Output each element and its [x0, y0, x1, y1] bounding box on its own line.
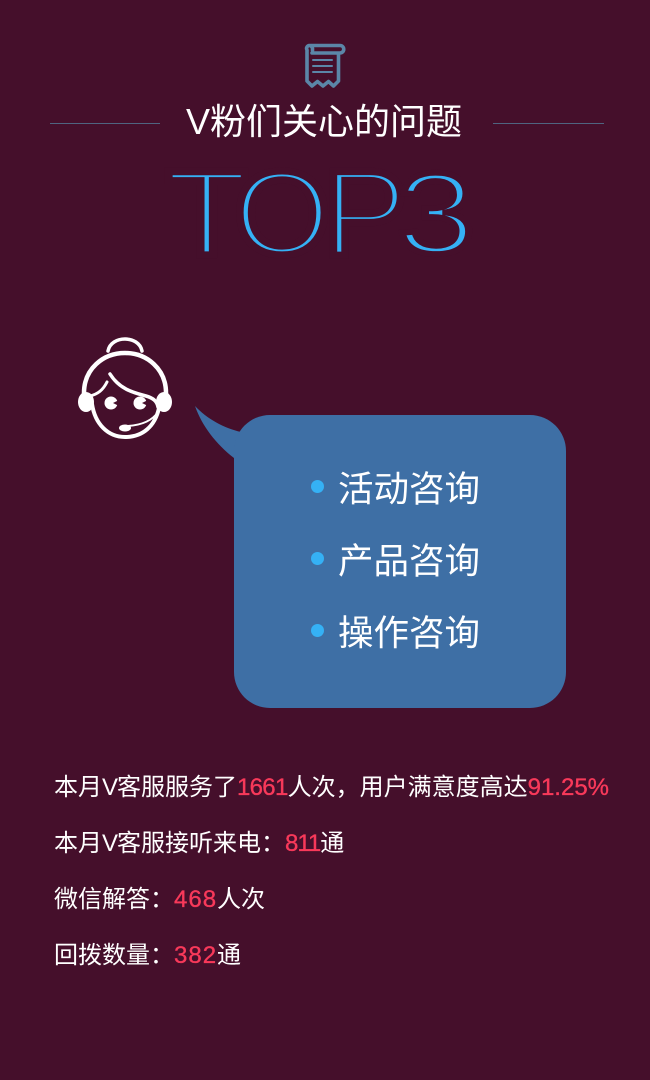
stat line 4: 回拨数量：382通 [54, 942, 241, 969]
icon: paper scroll [304, 44, 346, 88]
right divider [493, 123, 604, 124]
stat line 1: 本月V客服服务了1661人次，用户满意度高达91.25% [54, 774, 609, 801]
speech bubble [195, 406, 566, 708]
heading: V粉们关心的问题 [186, 101, 462, 142]
bubble tail and body [195, 406, 566, 708]
stats text [54, 774, 609, 969]
list: top three questions [311, 469, 480, 653]
icon: customer service agent [78, 337, 172, 439]
item 2: 产品咨询 [338, 541, 480, 581]
stat line 2: 本月V客服接听来电：811通 [54, 830, 344, 857]
heading: TOP3 [166, 150, 475, 270]
left divider [50, 123, 160, 124]
item 1: 活动咨询 [338, 469, 480, 509]
item 3: 操作咨询 [338, 613, 480, 653]
stat line 3: 微信解答：468人次 [54, 886, 265, 913]
